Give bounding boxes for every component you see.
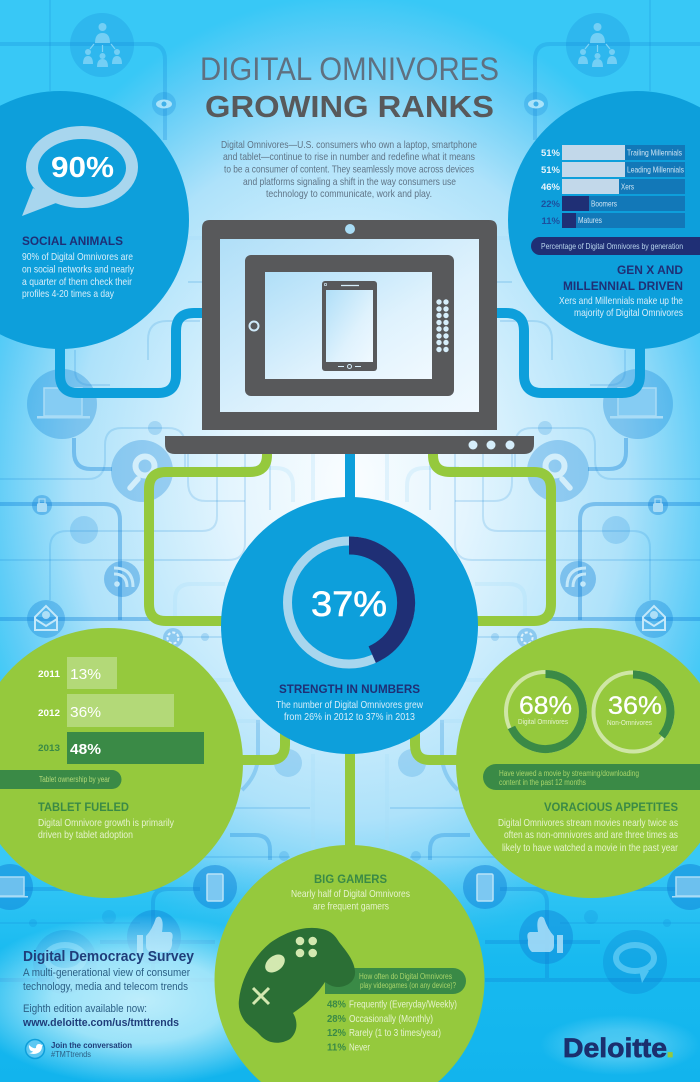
list: gaming frequency: 28% — [327, 1014, 346, 1025]
list: gaming frequency: Never — [349, 1042, 370, 1054]
title: GROWING RANKS — [205, 89, 494, 124]
list: gaming frequency: Rarely (1 to 3 times/year) — [349, 1028, 441, 1039]
bar chart: tablet ownership: 48% — [70, 741, 101, 758]
heading: gen x: GEN X AND — [617, 263, 683, 277]
icon: gear — [163, 628, 183, 648]
bottom right glow — [540, 1015, 700, 1075]
bar chart: tablet ownership: 2012 — [38, 708, 60, 719]
bar chart: tablet ownership — [38, 657, 204, 764]
icon: speech bubble 90%: 90% — [51, 152, 114, 184]
intro text — [221, 140, 477, 200]
panel: tablet fueled — [0, 628, 243, 898]
bar chart: generations: 22% — [541, 199, 561, 210]
body: big gamers — [291, 889, 410, 912]
title: DIGITAL OMNIVORES — [200, 51, 499, 87]
icon: laptop small — [0, 864, 33, 910]
icon: envelope — [27, 600, 65, 638]
icon: game controller — [239, 928, 355, 1043]
bar chart: tablet ownership: 2011 — [38, 669, 61, 680]
green connector, lower right — [415, 730, 462, 760]
bar chart: generations: Boomers — [591, 198, 617, 208]
body: tablet fueled: Digital Omnivore growth is primarily — [38, 818, 175, 829]
bar chart: generations: Xers — [621, 182, 634, 192]
legend pill: generations — [531, 237, 700, 255]
bottom left glow — [0, 915, 315, 1082]
social call to action: #TMTtrends — [51, 1050, 91, 1059]
body: strength in numbers: The number of Digital Omnivores grew — [276, 700, 423, 711]
donut chart: 36% — [594, 672, 672, 752]
intro text: technology to communicate, work and play. — [266, 189, 432, 200]
green connector, lower left — [238, 730, 285, 760]
body: social animals: profiles 4-20 times a day — [22, 289, 115, 300]
blue connector, left — [60, 313, 204, 393]
social call to action — [51, 1040, 132, 1059]
list: gaming frequency: 48% — [327, 1000, 346, 1010]
donut chart: 36%: 36% — [608, 692, 662, 720]
bar chart: tablet ownership: 13% — [70, 666, 101, 683]
bar chart: generations: 51% — [541, 148, 561, 159]
donut chart: 37% — [288, 541, 410, 664]
icon: speech bubble 90% — [22, 126, 138, 216]
green connector, right — [433, 450, 551, 621]
body: tablet fueled — [38, 818, 175, 841]
tablet — [245, 255, 454, 396]
legend pill: movie viewing — [483, 764, 700, 790]
body: strength in numbers — [276, 700, 423, 723]
blue connector, center — [345, 450, 355, 500]
heading: gen x: MILLENNIAL DRIVEN — [563, 279, 683, 293]
legend pill: tablet ownership: Tablet ownership by year — [39, 775, 110, 784]
heading: big gamers: BIG GAMERS — [314, 872, 387, 886]
list: gaming frequency — [327, 1000, 457, 1054]
body: social animals: a quarter of them check their — [22, 277, 132, 288]
legend pill: movie viewing: Have viewed a movie by streaming/downloading — [499, 769, 639, 778]
laptop — [165, 220, 534, 454]
body: voracious appetites — [498, 818, 678, 854]
heading: tablet fueled: TABLET FUELED — [38, 800, 129, 814]
survey info block: Digital Democracy Survey — [23, 948, 195, 965]
panel: voracious appetites — [456, 628, 700, 898]
icon: magnifier — [111, 440, 173, 502]
bar chart: generations — [541, 145, 685, 228]
icon: chat bubble — [33, 930, 97, 994]
bar chart: generations: 46% — [541, 182, 561, 193]
body: gen x — [559, 296, 683, 319]
blue connector, right — [496, 313, 640, 393]
bar chart: generations: Matures — [578, 215, 602, 225]
icon: RSS — [104, 561, 140, 597]
donut chart: 68% — [506, 672, 585, 751]
icon: eye — [152, 92, 176, 116]
icon: phone — [193, 865, 237, 909]
intro text: and platforms signaling a shift in the way consumers use — [243, 177, 456, 188]
bar chart: generations: Trailing Millennials — [627, 148, 682, 158]
list: gaming frequency: Frequently (Everyday/Weekly) — [349, 1000, 457, 1010]
list: gaming frequency: 11% — [327, 1042, 346, 1054]
panel: strength in numbers — [221, 497, 478, 754]
intro text: to be a consumer of content. They seamlessly move across devices — [224, 164, 474, 176]
legend pill: movie viewing: content in the past 12 months — [499, 778, 586, 787]
social call to action: Join the conversation — [51, 1040, 132, 1050]
panel: social animals — [0, 91, 189, 349]
survey info block: Eighth edition available now: — [23, 1003, 147, 1015]
body: tablet fueled: driven by tablet adoption — [38, 830, 133, 841]
intro text: and tablet—continue to rise in number and redefine what it means — [223, 152, 475, 163]
bar chart: tablet ownership: 2013 — [38, 743, 60, 754]
icon: people network — [70, 13, 134, 77]
circuit network, right side mirror — [387, 0, 700, 994]
bar chart: generations: Leading Millennials — [627, 164, 684, 174]
heading: voracious appetites: VORACIOUS APPETITES — [544, 800, 678, 814]
survey info block: technology, media and telecom trends — [23, 981, 188, 993]
list: gaming frequency: Occasionally (Monthly) — [349, 1014, 433, 1025]
green connector, center — [345, 750, 355, 850]
donut chart: 37%: 37% — [311, 585, 387, 624]
intro text: Digital Omnivores—U.S. consumers who own a laptop, smartphone — [221, 140, 477, 151]
panel: generations — [508, 91, 700, 349]
smartphone — [322, 281, 377, 371]
logo: Deloitte: . — [666, 1031, 674, 1064]
survey info block: A multi-generational view of consumer — [23, 967, 190, 979]
body: strength in numbers: from 26% in 2012 to 37% in 2013 — [284, 712, 415, 723]
node dots — [29, 421, 302, 927]
bar chart: generations: 51% — [541, 165, 561, 176]
heading: strength in numbers: STRENGTH IN NUMBERS — [279, 682, 420, 696]
survey info block — [22, 948, 195, 1029]
bar chart: generations: 11% — [542, 216, 561, 227]
panel: big gamers — [214, 845, 484, 1082]
icon: thumbs up — [127, 910, 181, 964]
heading: social animals: SOCIAL ANIMALS — [22, 234, 123, 248]
title — [200, 51, 499, 124]
green connector, left — [149, 450, 267, 621]
list: gaming frequency: 12% — [327, 1028, 346, 1039]
icon: lock — [32, 495, 52, 515]
icon: laptop — [27, 369, 97, 439]
body: big gamers: are frequent gamers — [313, 902, 389, 912]
legend pill: tablet ownership — [0, 770, 122, 789]
bar chart: tablet ownership: 36% — [70, 704, 101, 721]
legend pill: videogames: play videogames (on any device)? — [360, 981, 457, 990]
donut chart: 68%: 68% — [519, 692, 572, 720]
icon: twitter — [26, 1040, 44, 1058]
legend pill: videogames — [325, 968, 466, 994]
body: big gamers: Nearly half of Digital Omnivores — [291, 889, 410, 900]
donut chart: 68%: Digital Omnivores — [518, 717, 568, 726]
logo: Deloitte: Deloitte — [563, 1033, 667, 1063]
survey info block: www.deloitte.com/us/tmttrends — [22, 1017, 179, 1029]
donut chart: 36%: Non-Omnivores — [607, 718, 652, 727]
heading: gen x — [563, 263, 683, 293]
body: social animals: on social networks and nearly — [22, 264, 135, 276]
circuit network, left side — [0, 0, 313, 994]
legend pill: videogames: How often do Digital Omnivores — [359, 972, 452, 981]
body: social animals: 90% of Digital Omnivores are — [22, 252, 133, 263]
body: social animals — [22, 252, 135, 300]
